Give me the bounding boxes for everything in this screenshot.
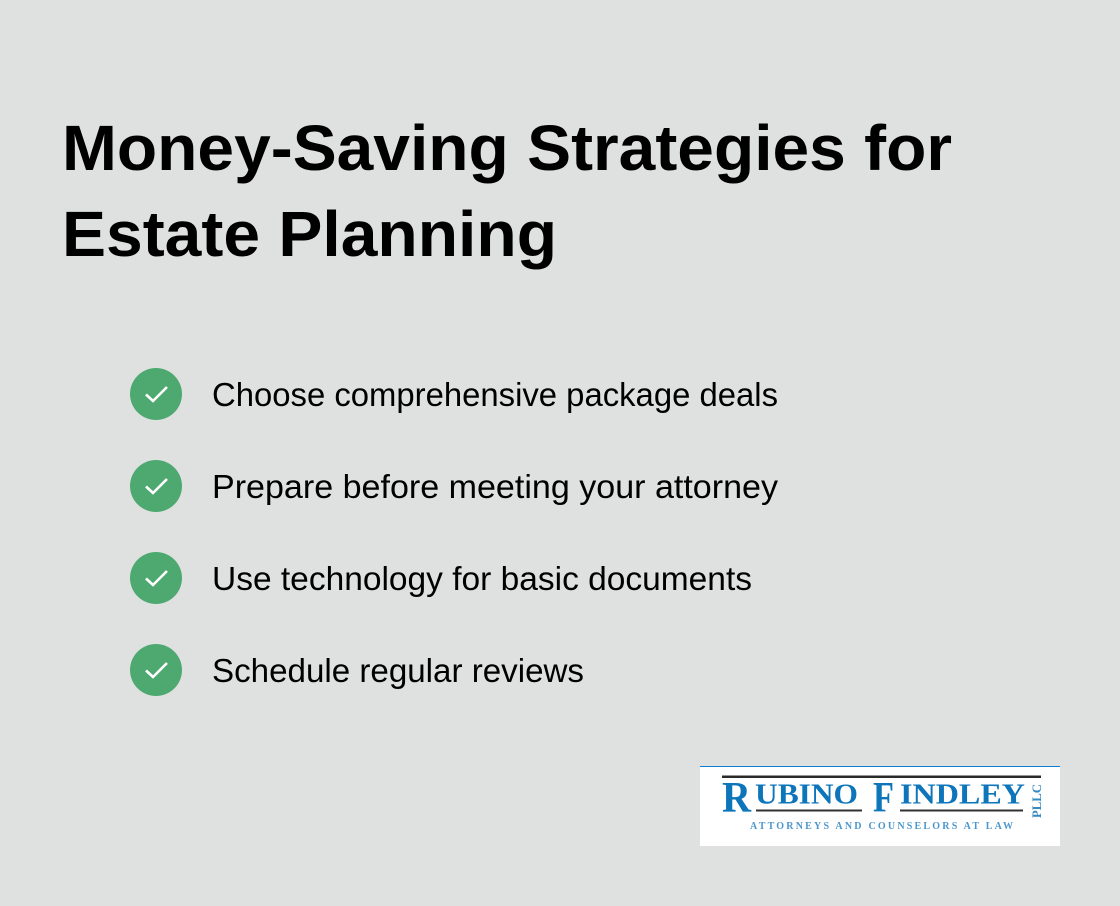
logo: Rubino Findley: INDLEY (900, 778, 1025, 810)
item: comprehensive package deals (130, 368, 778, 420)
checklist (130, 368, 779, 696)
title (62, 112, 952, 270)
logo: Rubino Findley: ATTORNEYS AND COUNSELORS AT LAW (750, 821, 1013, 832)
logo: Rubino Findley: R (722, 774, 752, 822)
logo: Rubino Findley: UBINO (755, 778, 858, 810)
title: Estate Planning (62, 198, 557, 270)
item: use technology (130, 552, 752, 604)
item: prepare before meeting (130, 460, 779, 512)
item: prepare before meeting: Prepare before meeting your attorney (212, 468, 779, 505)
item: schedule regular reviews: Schedule regular reviews (212, 652, 584, 689)
item: schedule regular reviews (130, 644, 584, 696)
title: Money-Saving Strategies for (62, 112, 952, 184)
item: use technology: Use technology for basic documents (212, 560, 752, 597)
logo: Rubino Findley (700, 766, 1060, 846)
logo: Rubino Findley: F (873, 774, 894, 822)
item: comprehensive package deals: Choose comprehensive package deals (212, 376, 778, 413)
logo: Rubino Findley: PLLC (1029, 784, 1044, 818)
